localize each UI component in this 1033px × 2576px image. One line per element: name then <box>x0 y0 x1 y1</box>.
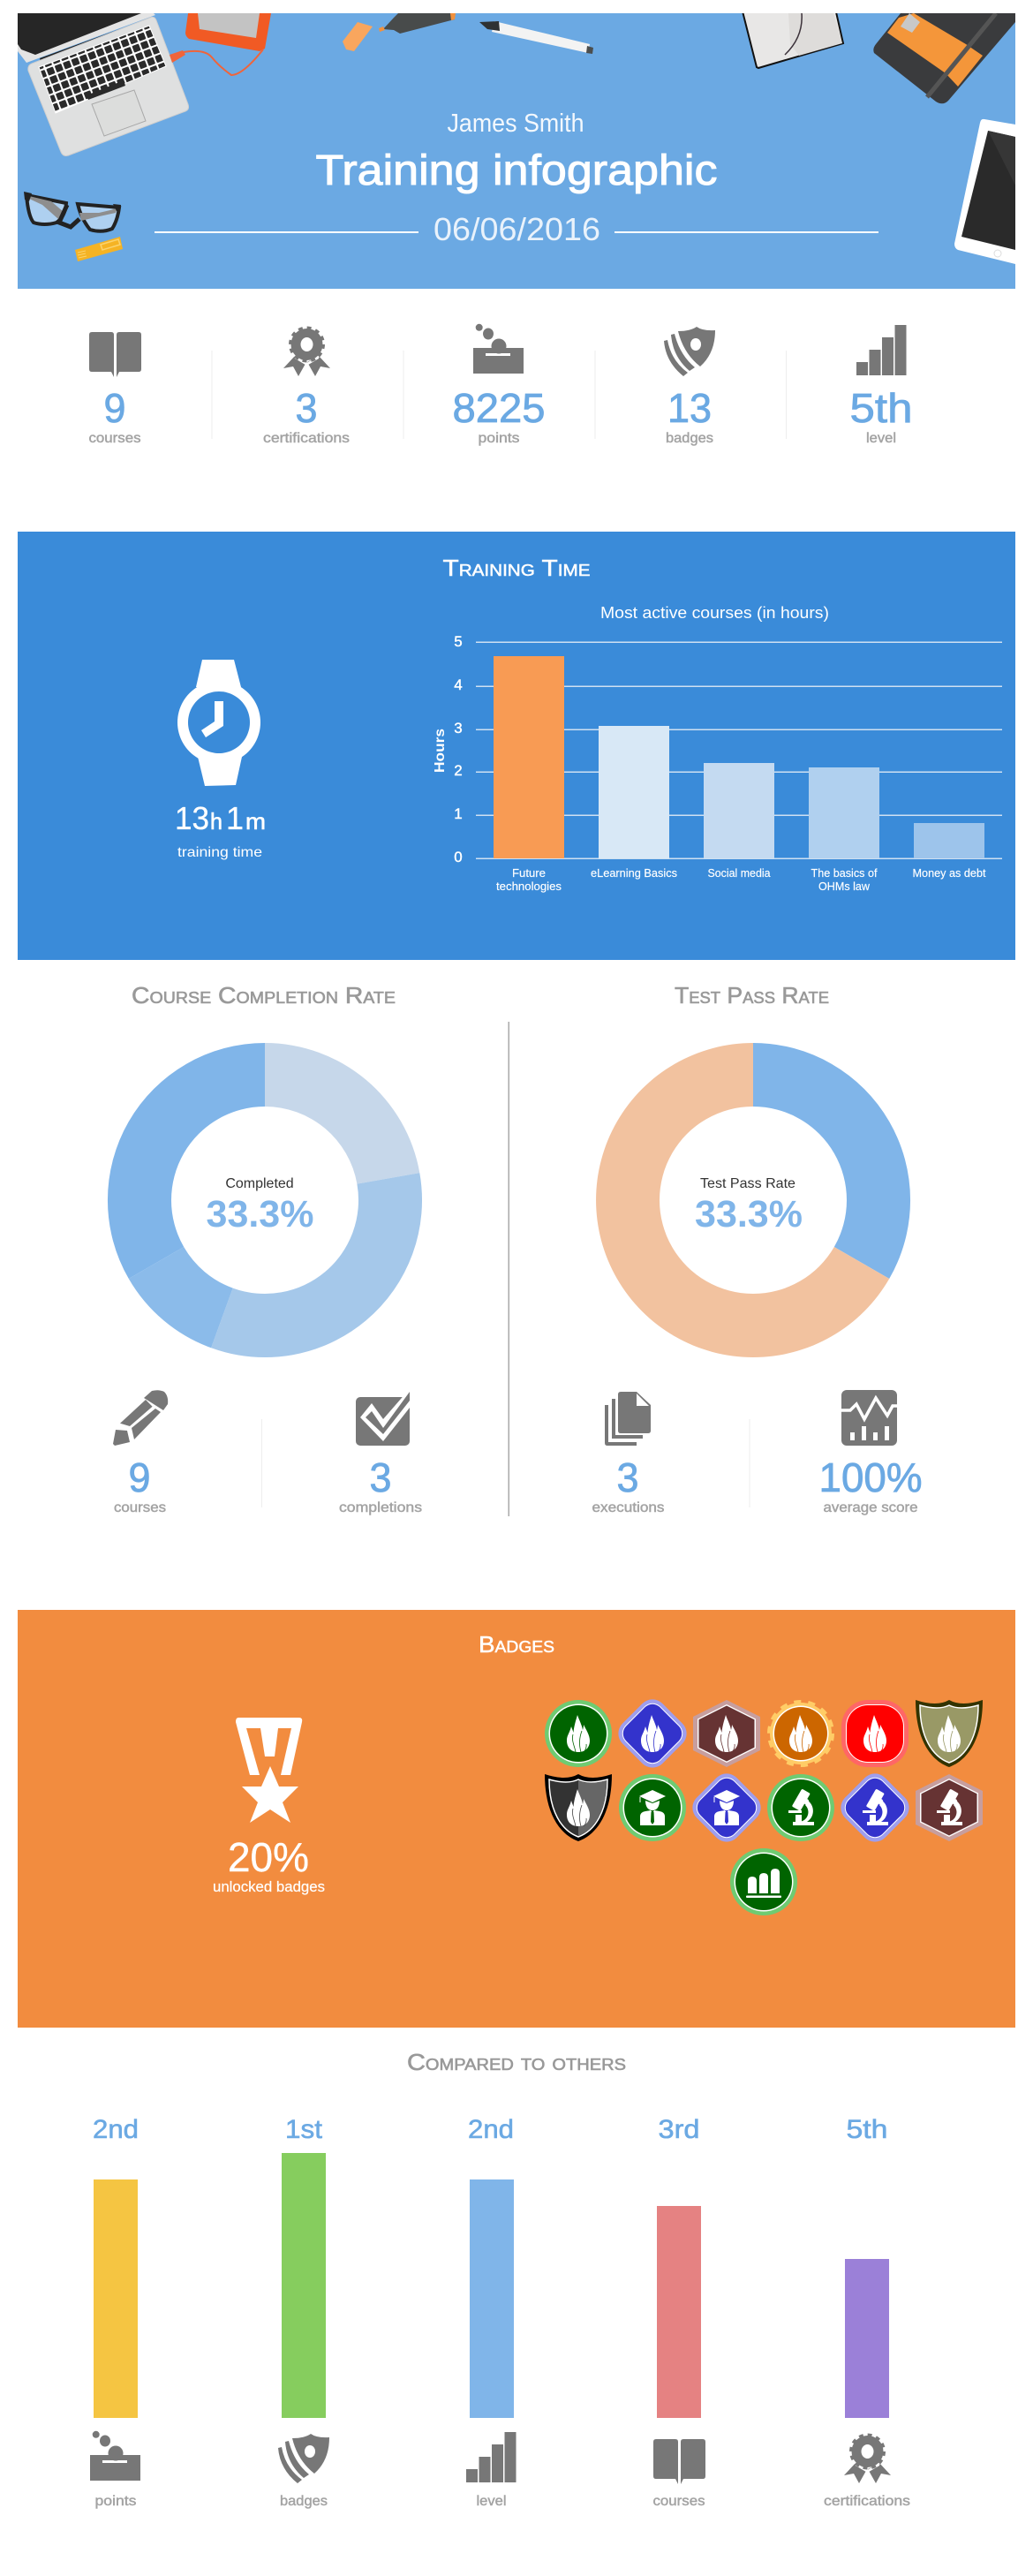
summary stats row <box>88 324 913 446</box>
column: certifications: certifications <box>824 2494 910 2509</box>
badge: green circle flame <box>545 1700 612 1767</box>
y axis labels: 2 <box>454 762 463 779</box>
training time value <box>175 800 266 836</box>
panel: training time <box>18 532 1015 960</box>
badge: brown hexagon flame <box>693 1700 760 1767</box>
heading: training time: Training Time <box>443 555 590 581</box>
icon: orange hard drive <box>170 13 271 75</box>
badge: orange scallop flame <box>769 1702 833 1765</box>
stat: certifications <box>263 328 350 446</box>
x axis labels: eLearning Basics <box>591 866 677 880</box>
stat: points <box>452 324 546 446</box>
column: certifications: 5th <box>846 2115 888 2144</box>
heading: test pass rate: Test Pass Rate <box>675 982 829 1008</box>
x axis labels: technologies <box>496 880 562 893</box>
column: level <box>466 2115 516 2509</box>
icon: highlighter <box>379 13 456 34</box>
stat: executions with documents icon <box>592 1392 664 1515</box>
stat: courses: 9 <box>104 385 125 431</box>
icon: USB clip <box>75 237 123 261</box>
unlocked percentage: 20% <box>228 1834 309 1880</box>
icon: medal <box>236 1718 302 1823</box>
stat: points: 8225 <box>452 385 546 431</box>
y axis labels: 5 <box>454 633 463 650</box>
stat: courses with pencil icon: 9 <box>129 1454 150 1500</box>
training time value: 1 <box>226 800 244 836</box>
column: points: 2nd <box>93 2115 139 2144</box>
icon: tablet <box>954 119 1015 264</box>
badge: green circle graduate <box>619 1774 686 1841</box>
donut value: 33.3% <box>695 1193 803 1235</box>
column: courses: 3rd <box>659 2115 699 2144</box>
stat: executions with documents icon: 3 <box>616 1454 639 1500</box>
unlocked label: unlocked badges <box>213 1878 325 1895</box>
heading: compared to others: Compared to others <box>407 2049 626 2075</box>
heading: course completion rate: Course Completion Rate <box>132 982 396 1008</box>
panel: badges <box>18 1610 1015 2028</box>
x axis labels: Future <box>512 866 546 880</box>
stat: courses with pencil icon: courses <box>114 1500 166 1515</box>
icon: white notebook <box>742 13 844 69</box>
stat: courses with pencil icon <box>113 1390 168 1515</box>
column: points <box>90 2115 140 2509</box>
donut label: Completed <box>225 1176 294 1191</box>
stat: completions with checkbox icon <box>339 1392 422 1515</box>
donut label: Test Pass Rate <box>700 1176 795 1191</box>
y axis labels: 0 <box>454 849 463 865</box>
y axis title: Hours <box>433 729 448 773</box>
training time value: m <box>245 808 266 835</box>
y axis labels: 3 <box>454 720 463 737</box>
stat: courses <box>88 332 141 446</box>
donut chart: course completion <box>108 1043 422 1357</box>
icon: glasses <box>24 192 121 231</box>
badge grid <box>545 1694 983 1915</box>
column: level: 2nd <box>468 2115 514 2144</box>
stat: points: points <box>479 431 519 446</box>
x axis labels <box>496 866 986 893</box>
column: courses: courses <box>653 2494 705 2509</box>
donut value: 33.3% <box>207 1193 313 1235</box>
column: badges: badges <box>280 2494 328 2509</box>
desk illustrations <box>18 4 1015 264</box>
column: badges <box>278 2115 329 2509</box>
bar chart: most active courses <box>433 604 1002 893</box>
header banner <box>18 4 1015 289</box>
badge: black shield flame <box>545 1774 612 1841</box>
x axis labels: OHMs law <box>818 880 871 893</box>
stat: level <box>849 325 913 446</box>
user name: James Smith <box>447 110 584 138</box>
chart title: Most active courses (in hours) <box>600 604 829 622</box>
badge: blue diamond microscope <box>835 1768 915 1847</box>
stat: courses: courses <box>88 431 141 446</box>
comparison chart <box>90 2115 910 2509</box>
title: Training infographic <box>316 147 717 194</box>
stat: average score with chart icon: average score <box>823 1500 918 1515</box>
icon: highlighter cap <box>343 22 373 51</box>
donut chart: test pass rate <box>596 1043 910 1357</box>
training time value: h <box>210 808 222 835</box>
badge: brown hexagon microscope <box>916 1774 983 1841</box>
x axis labels: Money as debt <box>913 866 986 880</box>
date with rules: 06/06/2016 <box>434 211 600 247</box>
stat: level: level <box>866 431 896 446</box>
stat: badges: badges <box>666 431 713 446</box>
training time label: training time <box>177 845 262 860</box>
completion and test stats <box>113 1390 922 1515</box>
y axis labels: 1 <box>454 805 463 822</box>
bars <box>494 656 984 858</box>
stat: average score with chart icon: 100% <box>819 1454 922 1500</box>
column: points: points <box>95 2494 136 2509</box>
y axis labels: 4 <box>454 676 463 693</box>
heading: badges: Badges <box>479 1631 554 1658</box>
stat: completions with checkbox icon: completions <box>339 1500 422 1515</box>
badge: green circle microscope <box>767 1774 834 1841</box>
icon: watch <box>177 660 260 786</box>
stat: badges <box>664 327 715 446</box>
stat: average score with chart icon <box>819 1390 922 1515</box>
badge: blue diamond graduate <box>687 1768 766 1847</box>
stat: level: 5th <box>849 385 913 431</box>
column: courses <box>653 2115 705 2509</box>
stat: badges: 13 <box>667 385 712 431</box>
stat: certifications: certifications <box>263 431 350 446</box>
column: certifications <box>824 2115 910 2509</box>
stat: completions with checkbox icon: 3 <box>369 1454 392 1500</box>
stat: executions with documents icon: executions <box>592 1500 664 1515</box>
icon: laptop <box>18 12 189 155</box>
column: badges: 1st <box>285 2115 323 2144</box>
y axis labels <box>454 633 463 865</box>
badge: red rounded flame <box>841 1700 909 1767</box>
badge: olive shield flame <box>916 1700 983 1767</box>
badge: blue diamond flame <box>613 1694 692 1773</box>
x axis labels: Social media <box>708 866 771 880</box>
column: level: level <box>477 2494 507 2509</box>
icon: black notebook <box>873 13 1015 103</box>
x axis labels: The basics of <box>811 866 878 880</box>
stat: certifications: 3 <box>295 385 318 431</box>
icon: white pen <box>479 21 593 54</box>
badge: green circle bars <box>730 1848 797 1915</box>
training time value: 13 <box>175 800 209 836</box>
